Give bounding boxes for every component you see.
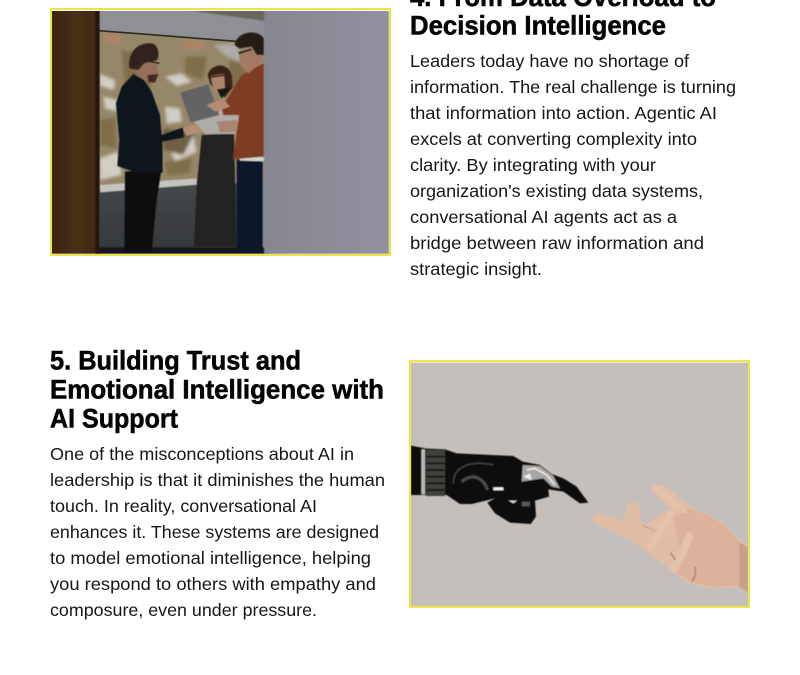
text block: section 5 body: touch. In reality, conversational AI	[50, 496, 317, 516]
text block: section 4 body: conversational AI agents act as a	[410, 207, 677, 227]
text block: section 5 body: One of the misconceptions about AI in	[50, 444, 354, 464]
text block: section 4 body: Leaders today have no shortage of	[410, 51, 689, 71]
text block: section 4 body: bridge between raw information and	[410, 233, 704, 253]
window	[97, 30, 270, 190]
text block: section 4 body: information. The real challenge is turning	[410, 77, 736, 97]
man in suit	[116, 43, 202, 252]
foreground grey wall	[264, 8, 392, 257]
text block: section 5 body: you respond to others with empathy and	[50, 574, 376, 594]
image border	[51, 9, 390, 255]
heading: section 5: 5. Building Trust and	[50, 346, 301, 376]
upper wall	[97, 10, 270, 50]
text block: section 4 body: that information into action. Agentic AI	[410, 103, 717, 123]
text block: section 4 body: organization's existing data systems,	[410, 181, 703, 201]
heading: section 5: AI Support	[50, 404, 178, 434]
woman with laptop	[180, 66, 244, 247]
heading: section 4	[410, 0, 716, 40]
sill	[99, 178, 197, 193]
text block: section 4 body	[410, 51, 736, 279]
image border	[410, 361, 749, 607]
text block: section 5 body: leadership is that it diminishes the human	[50, 470, 385, 490]
human hand	[593, 485, 748, 592]
man in rust shirt	[207, 33, 268, 252]
wood door frame	[50, 8, 99, 257]
heading: section 4: Decision Intelligence	[410, 10, 666, 40]
heading: section 5: Emotional Intelligence with	[50, 374, 384, 404]
text block: section 5 body: to model emotional intelligence, helping	[50, 548, 371, 568]
text block: section 5 body: composure, even under pressure.	[50, 600, 317, 620]
photo: robotic hand reaching toward a human hand	[409, 361, 749, 608]
heading: section 5	[50, 346, 384, 434]
photo: three colleagues reviewing a laptop by a window	[50, 8, 393, 257]
text block: section 4 body: strategic insight.	[410, 259, 542, 279]
text block: section 5 body	[50, 444, 385, 620]
robotic hand	[411, 446, 588, 524]
text block: section 4 body: excels at converting complexity into	[410, 129, 697, 149]
text block: section 4 body: clarity. By integrating with your	[410, 155, 656, 175]
wall below window	[99, 183, 240, 253]
text block: section 5 body: enhances it. These systems are designed	[50, 522, 379, 542]
